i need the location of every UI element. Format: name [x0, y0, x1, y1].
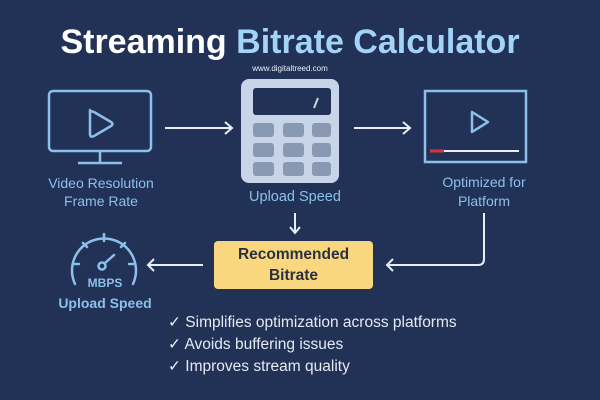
- arrow 2: [354, 122, 410, 134]
- label: optimized for platform: [442, 174, 526, 209]
- label: optimized for platform: Optimized for: [442, 174, 526, 190]
- arrow down to bitrate: [290, 213, 300, 233]
- icon: calculator: [241, 79, 339, 183]
- box: recommended bitrate: [214, 241, 373, 289]
- label: video resolution: [48, 175, 154, 209]
- text: Upload Speed: [58, 295, 152, 311]
- label: upload speed: Upload Speed: [249, 189, 341, 205]
- checklist: ✓ Avoids buffering issues: [168, 336, 343, 353]
- checklist: ✓ Simplifies optimization across platforms: [168, 314, 457, 331]
- label: optimized for platform: Platform: [458, 193, 510, 209]
- box: recommended bitrate: Bitrate: [269, 267, 318, 284]
- checklist: ✓ Improves stream quality: [168, 358, 350, 375]
- checklist: [168, 314, 457, 375]
- label: video resolution: Frame Rate: [64, 193, 138, 209]
- title: Streaming Bitrate Calculator: [60, 23, 520, 61]
- arrow 1: [165, 122, 232, 134]
- box: recommended bitrate: Recommended: [238, 246, 349, 263]
- icon: gauge: [72, 234, 136, 284]
- icon: video player: [425, 91, 526, 162]
- website url: www.digitaltreed.com: [252, 64, 328, 73]
- label: video resolution: Video Resolution: [48, 175, 154, 191]
- label: mbps upload speed: MBPS: [88, 276, 122, 290]
- arrow from platform to bitrate: [387, 213, 484, 271]
- arrow to gauge: [148, 259, 203, 271]
- icon: monitor: [49, 91, 151, 163]
